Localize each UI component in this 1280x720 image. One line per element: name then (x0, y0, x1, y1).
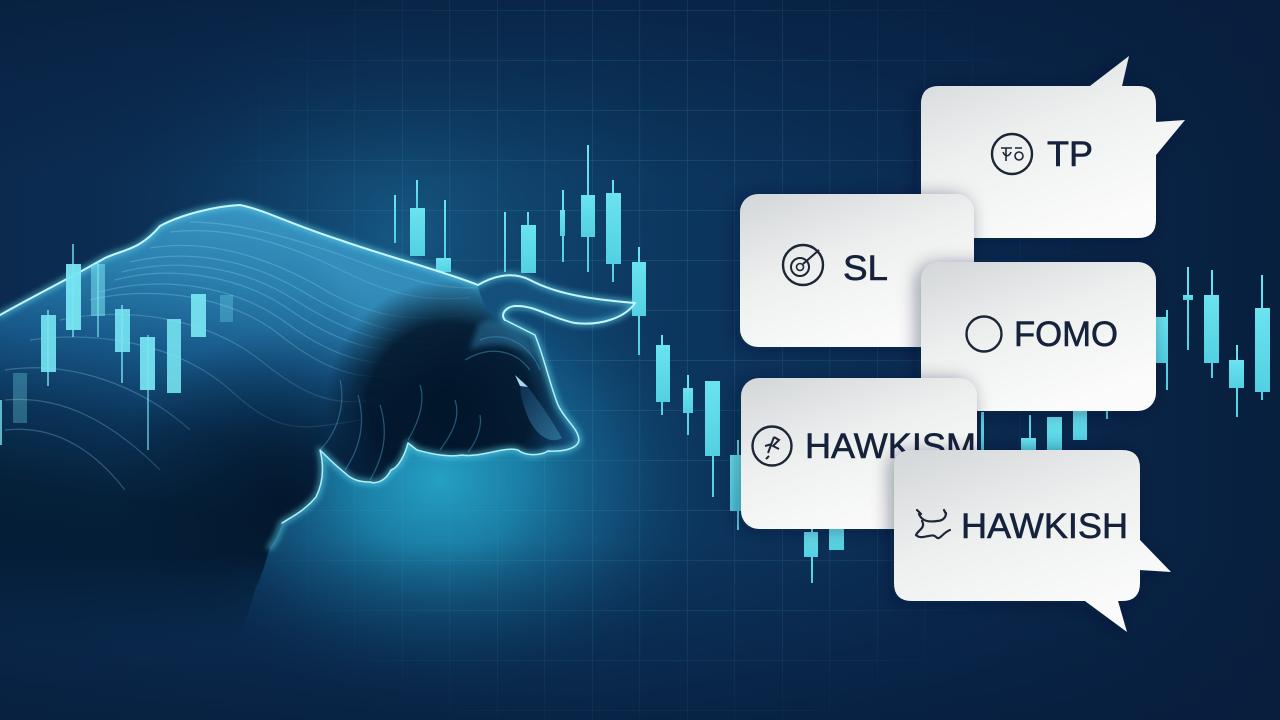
speech bubble: FOMO (921, 262, 1156, 411)
speech bubble: TP (921, 56, 1185, 238)
bull body with fur shading (0, 206, 578, 616)
bubble body with tails (921, 56, 1185, 238)
icon: bull horns (916, 510, 950, 538)
bubble body (741, 378, 977, 529)
candlesticks overlaid on the bull (0, 244, 233, 450)
label: FOMO: FOMO (1014, 315, 1118, 354)
label: HAWKISH: HAWKISH (961, 507, 1128, 546)
label: HAWKISM: HAWKISM (805, 427, 976, 466)
bull rim light (0, 205, 635, 547)
forehead light patch (470, 320, 538, 360)
bull eye (515, 375, 528, 387)
bubble body (740, 194, 974, 347)
candlesticks behind the bull and cards (394, 145, 1270, 583)
speech bubble: HAWKISM (741, 378, 977, 529)
icon: take-profit badge (992, 134, 1032, 174)
speech bubble: HAWKISH (894, 450, 1171, 632)
label: TP: TP (1047, 135, 1093, 174)
shoulder highlight band (355, 290, 398, 330)
speech bubble: SL (740, 194, 974, 347)
icon: target gauge (783, 245, 823, 285)
icon: empty circle (966, 316, 1002, 352)
bull snout highlight (520, 380, 562, 440)
bubble body (921, 262, 1156, 411)
bubble body with tails (894, 450, 1171, 632)
icon: hawk glyph badge (752, 426, 792, 466)
label: SL: SL (843, 249, 888, 288)
bull horn (478, 275, 635, 324)
bull silhouette (0, 195, 635, 645)
